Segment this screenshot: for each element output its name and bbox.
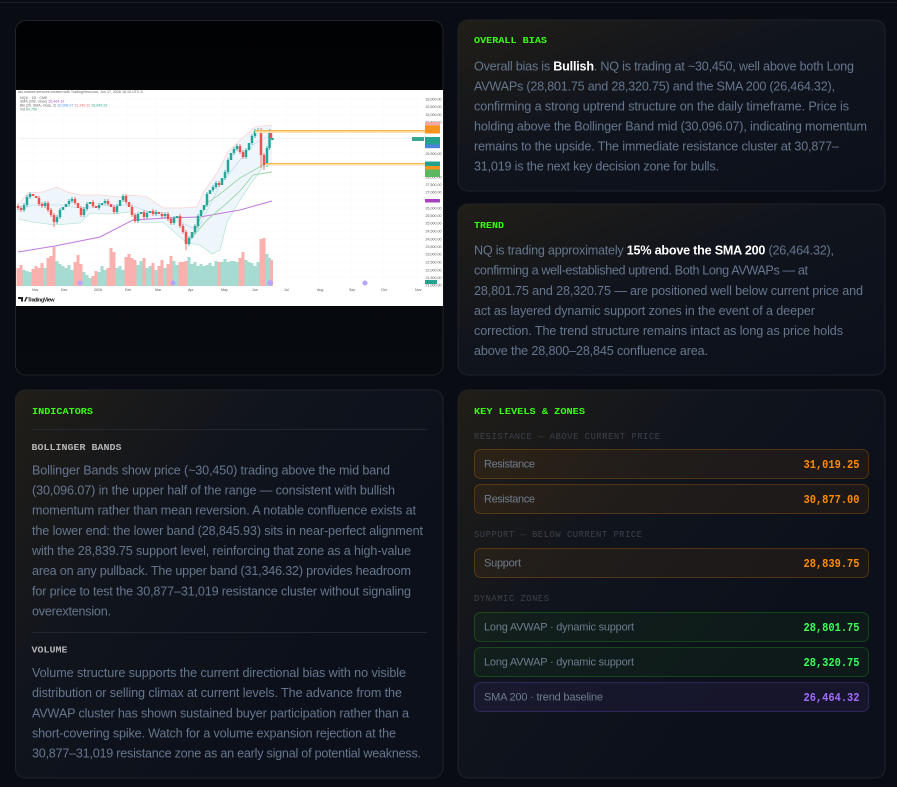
text block: volume: AVWAP cluster has shown sustained buyer participation rather than a	[32, 706, 409, 720]
text block: bollinger bands: with the 28,839.75 support level, reinforcing that zone as a high-value	[31, 544, 411, 558]
subheading: bollinger bands: BOLLINGER BANDS	[32, 442, 122, 453]
level row: SMA 200 26,464.32: SMA 200 · trend baseline	[484, 692, 603, 704]
price axis labels: 25,500.00	[426, 214, 442, 218]
time axis labels: Jul	[284, 288, 289, 292]
time axis labels: Dec	[61, 288, 68, 292]
level row: resistance 31,019.25	[474, 450, 868, 478]
subheading: volume: VOLUME	[32, 644, 68, 656]
price axis labels: 28,000.00	[426, 176, 442, 180]
price axis labels: 27,000.00	[426, 190, 442, 194]
candlesticks	[18, 128, 272, 250]
time axis labels: Mar	[155, 288, 162, 292]
price axis labels: 26,000.00	[426, 206, 442, 210]
price axis labels: 21,500.00	[426, 276, 442, 280]
level row: resistance 30,877.00: Resistance	[484, 494, 535, 506]
TradingView logo: TradingView	[28, 298, 55, 304]
time axis labels: Jun	[252, 288, 258, 292]
text block: volume: Volume structure supports the current directional bias with no visible	[32, 666, 406, 680]
text block: overall bias: AVWAPs (28,801.75 and 28,320.75) and the SMA 200 (26,464.32),	[474, 80, 835, 94]
level row: long AVWAP 28,320.75: Long AVWAP · dynamic support	[484, 656, 634, 668]
price axis labels: 24,000.00	[426, 238, 442, 242]
time axis labels: Aug	[317, 288, 323, 292]
text block: bollinger bands: the lower end: the lower band (28,845.93) sits in near-perfect alignment	[32, 524, 424, 538]
volume bars	[18, 238, 272, 286]
panel: chart image	[16, 20, 443, 375]
level row: long AVWAP 28,801.75: Long AVWAP · dynamic support	[484, 622, 634, 634]
time axis labels: Sep	[349, 288, 355, 292]
panel: indicators	[16, 390, 443, 778]
subheading: support group: SUPPORT — BELOW CURRENT PRICE	[474, 530, 642, 540]
TradingView logo	[18, 297, 55, 304]
time axis labels: Nov	[415, 288, 422, 292]
event markers	[78, 280, 368, 286]
Bollinger Bands	[18, 125, 272, 254]
panel: key levels and zones	[458, 390, 885, 778]
panel: trend	[458, 204, 885, 375]
price axis labels: 32,000.00	[426, 113, 442, 117]
text block: bollinger bands: (30,096.07) in the upper half of the range — consistent with bullish	[32, 484, 395, 498]
price axis labels: 23,000.00	[426, 252, 442, 256]
text block: bollinger bands: overextension.	[32, 604, 111, 618]
level row: long AVWAP 28,801.75	[474, 612, 868, 642]
text block: bollinger bands: Bollinger Bands show price (~30,450) trading above the mid band	[32, 464, 390, 478]
text block: bollinger bands: for price to test the 30,877–31,019 resistance cluster without signaling	[32, 584, 411, 598]
level row: resistance 31,019.25: 31,019.25	[804, 459, 860, 472]
text block: overall bias: holding above the Bollinger Band mid (30,096.07), indicating momentum	[474, 120, 867, 134]
level row: long AVWAP 28,320.75	[474, 648, 868, 676]
level row: support 28,839.75	[474, 548, 868, 578]
text block: overall bias: remains to the upside. The immediate resistance cluster at 30,877–	[474, 140, 839, 154]
price axis labels: 22,000.00	[426, 268, 442, 272]
price axis labels: 24,500.00	[426, 230, 442, 234]
chart: NQ daily candlesticks	[16, 90, 443, 306]
price axis labels: 21,000.00	[426, 284, 442, 288]
time axis labels: May	[221, 288, 228, 292]
price axis labels: 25,000.00	[426, 222, 442, 226]
chart header text: tan-market-services created with TradingView.com, Jun 17, 2026 16:15 UTC-5	[18, 90, 143, 94]
price axis labels: 23,500.00	[426, 245, 442, 249]
price axis labels: 27,500.00	[426, 183, 442, 187]
text block: overall bias: 31,019 is the next key decision zone for bulls.	[474, 160, 719, 174]
price axis labels: 31,500.00	[426, 120, 442, 124]
heading: key levels: KEY LEVELS & ZONES	[474, 406, 585, 417]
time axis labels	[32, 288, 422, 292]
text block: trend: 28,801.75 and 28,320.75 — are positioned well below current price and	[474, 284, 863, 298]
subheading: resistance group: RESISTANCE — ABOVE CURRENT PRICE	[474, 432, 660, 442]
price axis labels	[426, 98, 442, 288]
text block: bollinger bands: momentum rather than mean reversion. A notable confluence exists at	[32, 504, 416, 518]
Long AVWAP lines	[190, 163, 272, 240]
chart header text: BB (20, SMA, close, 2) 30,096.07 31,346.32 28,845.93	[20, 104, 107, 108]
chart header text	[18, 90, 143, 112]
text block: volume	[32, 666, 421, 760]
text block: overall bias: confirming a strong uptrend structure on the daily timeframe. Price is	[474, 100, 849, 114]
text block: trend: NQ is trading approximately 15% above the SMA 200 (26,464.32),	[474, 244, 834, 258]
time axis labels: Feb	[125, 288, 131, 292]
heading: trend: TREND	[474, 220, 504, 231]
price axis labels: 22,500.00	[426, 260, 442, 264]
level row: support 28,839.75: Support	[484, 558, 521, 570]
panel: overall bias	[458, 20, 885, 191]
level row: support 28,839.75: 28,839.75	[804, 558, 860, 571]
text block: overall bias: Overall bias is Bullish. NQ is trading at ~30,450, well above both Long	[474, 60, 854, 74]
resistance and support zones	[255, 130, 425, 166]
time axis labels: 2026	[94, 288, 102, 292]
level row: SMA 200 26,464.32	[474, 682, 868, 712]
heading: overall bias: OVERALL BIAS	[474, 35, 547, 46]
SMA 200 line	[18, 201, 272, 252]
level row: resistance 30,877.00: 30,877.00	[804, 494, 860, 507]
level row: long AVWAP 28,320.75: 28,320.75	[804, 657, 860, 670]
price tags	[412, 122, 440, 284]
text block: trend	[474, 244, 863, 358]
price axis labels: 29,500.00	[426, 152, 442, 156]
chart header text: Vol 84.75K	[20, 108, 38, 112]
text block: bollinger bands	[31, 464, 424, 618]
heading: indicators: INDICATORS	[32, 406, 93, 417]
text block: volume: short-covering spike. Watch for a volume expansion rejection at the	[32, 726, 396, 740]
text block: volume: 30,877–31,019 resistance zone as an early signal of potential weakness.	[32, 746, 421, 760]
chart header text: NQ1! · 1D · CME	[20, 96, 48, 100]
chart header text: SMA (200, close) 26,464.32	[20, 100, 64, 104]
text block: trend: above the 28,800–28,845 confluence area.	[474, 344, 708, 358]
text block: trend: act as layered dynamic support zones in the event of a deeper	[474, 304, 815, 318]
level row: SMA 200 26,464.32: 26,464.32	[804, 692, 860, 705]
level row: long AVWAP 28,801.75: 28,801.75	[804, 622, 860, 635]
time axis labels: Apr	[188, 288, 194, 292]
text block: overall bias	[474, 60, 867, 174]
text block: trend: confirming a well-established uptrend. Both Long AVWAPs — at	[474, 264, 808, 278]
text block: volume: distribution or selling climax at current levels. The advance from the	[32, 686, 402, 700]
time axis labels: Oct	[381, 288, 387, 292]
text block: bollinger bands: area on any pullback. The upper band (31,346.32) provides headroom	[32, 564, 411, 578]
subheading: dynamic zones: DYNAMIC ZONES	[474, 594, 549, 604]
text block: trend: correction. The trend structure remains intact as long as price holds	[474, 324, 843, 338]
level row: resistance 31,019.25: Resistance	[484, 458, 535, 470]
time axis labels: Nov	[32, 288, 39, 292]
price axis labels: 33,000.00	[426, 98, 442, 102]
level row: resistance 30,877.00	[474, 484, 868, 514]
price axis labels: 32,500.00	[426, 105, 442, 109]
